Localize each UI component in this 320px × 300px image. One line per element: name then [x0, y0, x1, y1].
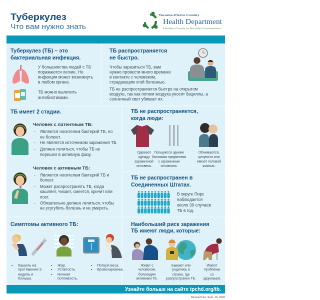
panel: what is TB: инфекция может возникнуть [38, 74, 94, 79]
panel: two stages: Обязательно должен лечиться, чтобы [40, 201, 114, 206]
symptom lists: потливость. [58, 277, 78, 281]
panel: TB not common in US: наблюдается [177, 197, 203, 202]
captions: not transmitted: имеют половой [197, 159, 221, 163]
panel: TB not common in US: В округе Пирс [177, 192, 204, 196]
captions: not transmitted: бытовыми предметами [152, 155, 186, 159]
panel: not transmitted when: когда люди: [131, 116, 164, 122]
panel: main background [6, 36, 225, 294]
risk captions: Бывают или [171, 263, 191, 267]
panel: two stages: - [34, 172, 36, 177]
panel: highest risk [131, 221, 222, 281]
symptom lists: Усталость. [58, 268, 76, 272]
icon: elderly man with cane [203, 238, 222, 260]
panel: TB not common in US: ТБ не распространен в [131, 175, 193, 181]
panel: not transmitted when [131, 109, 221, 168]
risk captions: Имеют [207, 263, 218, 267]
panel: two stages: ТБ имеет 2 стадии. [10, 110, 62, 116]
panel: what is TB: антибиотиками. [38, 95, 69, 100]
panel: spreads slowly: Чтобы заразиться ТБ, вам [110, 64, 161, 69]
symptom lists: • [91, 263, 93, 267]
captions: not transmitted: Одевают [137, 150, 151, 154]
icon: sweating person [54, 235, 74, 256]
chart: 30 cases pictogram [138, 191, 170, 213]
risk captions: со [210, 272, 214, 276]
panel: TB not common in US: Соединенных Штатах. [131, 182, 191, 188]
risk captions: Живут с [141, 263, 154, 267]
panel: not transmitted when: ТБ не распространяется, [131, 109, 198, 115]
panel: what is TB: У большинства людей с ТБ [38, 64, 91, 69]
panel: two stages [10, 110, 117, 211]
panel: two stages: болеет. [40, 178, 54, 182]
logo: Tacoma-Pierce County Health Department: Tacoma-Pierce County [158, 13, 200, 17]
captions: not transmitted: целуются или [198, 155, 220, 159]
icon: two men on sofa with clock [188, 48, 218, 81]
risk captions: распространен ТБ. [166, 277, 196, 281]
symptom lists: • [51, 272, 53, 276]
panel: two stages: - [34, 129, 36, 134]
title [10, 12, 86, 31]
icon: cutlery [169, 125, 178, 146]
panel: two stages: Должен лечиться, чтобы ТБ не [40, 147, 101, 152]
risk captions: человеком, [138, 268, 156, 272]
panel: what is TB: в любом органе. [38, 79, 70, 84]
panel: what is TB [10, 48, 94, 101]
title: Что вам нужно знать [10, 22, 86, 31]
icon: bathroom scale [83, 237, 100, 254]
icon: person with latent TB [12, 124, 28, 155]
footer band: Узнайте больше на сайте tpchd.org/tb. [125, 286, 221, 293]
icon: antibiotics [14, 89, 26, 101]
icon: traveller with globe [166, 240, 196, 260]
panel: spreads slowly [110, 48, 218, 101]
icon: lungs [12, 65, 29, 84]
panel: spreads slowly: не быстро. [110, 55, 139, 62]
panel: two stages: не усугубить болезнь и не умереть. [40, 206, 109, 211]
captions: not transmitted: человека. [136, 164, 152, 168]
captions: not transmitted: жизнью. [203, 164, 215, 168]
risk captions: стране, где [172, 272, 190, 276]
panel: two stages: перешел в активную фазу. [40, 152, 92, 157]
panel: two stages: - [34, 201, 36, 206]
panel: spreads slowly: воздухе, так как потоки воздуха уносят бациллы, а [110, 91, 209, 96]
symptom lists: • [91, 268, 93, 272]
logo: Tacoma-Pierce County Health Department [143, 12, 223, 30]
panel: two stages: - [34, 147, 36, 152]
captions: not transmitted: Обнимаются, [198, 150, 220, 154]
captions: not transmitted: человеком. [161, 164, 177, 168]
risk captions: здоровьем. [203, 277, 221, 281]
captions: not transmitted: одежду [138, 155, 150, 159]
risk captions: проблемы [204, 268, 221, 272]
risk captions [136, 263, 221, 281]
panel: spreads slowly: ТБ распространяется [110, 49, 167, 55]
symptom lists: • [51, 268, 53, 272]
panel: two stages: поет. [40, 195, 49, 200]
symptom lists: Жар. [58, 263, 66, 267]
panel: spreads slowly: ТБ не распространяется быстро на открытом [110, 86, 198, 91]
panel: spreads slowly: страдающим этой болезнью. [110, 79, 166, 84]
footer band [6, 285, 225, 294]
symptom lists: недель и [18, 272, 33, 276]
icon: coughing person [11, 234, 27, 256]
icon: kissing couple [199, 123, 218, 147]
captions: not transmitted [135, 150, 221, 168]
captions: not transmitted: с зараженным [158, 159, 180, 163]
panel: two stages: - [34, 184, 36, 189]
symptom lists [12, 263, 124, 281]
panel: spreads slowly: солнечный свет убивает их. [110, 96, 164, 101]
symptom lists: Кровохарканье. [97, 268, 124, 272]
panel: what is TB: ТБ можно вылечить [38, 89, 78, 94]
icon: person with active TB [12, 172, 28, 204]
panel: two stages: - [34, 140, 36, 145]
icon: sick person with caregiver [132, 238, 158, 260]
icon: shirt [131, 125, 154, 147]
captions: not transmitted: Пользуются одними [154, 150, 184, 154]
panel: what is TB: поражаются легкие. Но [38, 69, 84, 74]
risk captions: родились в [172, 268, 190, 272]
panel: two stages: Человек с латентным ТБ: [33, 122, 93, 127]
panel: TB not common in US: ТБ в год. [177, 208, 194, 213]
icon: thermometer [33, 236, 49, 254]
panel: what is TB: Туберкулез (ТБ) – это [10, 48, 69, 55]
panel: spreads slowly: нужно провести много времени [110, 69, 171, 74]
panel: symptoms: Симптомы активного ТБ: [10, 222, 78, 228]
icon: person coughing blood [105, 234, 122, 258]
revision note: Revised Nov. Sept. 10, 2020 [191, 295, 226, 299]
panel: two stages: Является носителем бактерий ТБ, но [40, 129, 113, 134]
symptom lists: Ночная [58, 272, 70, 276]
panel: symptoms [10, 222, 124, 281]
risk captions: болеющим [138, 272, 156, 276]
risk captions: активным ТБ. [136, 277, 158, 281]
top teal band [6, 36, 225, 44]
logo: Tacoma-Pierce County Health Department: Health Department [163, 17, 223, 26]
symptom lists: протяжении 3 [18, 268, 41, 272]
panel: what is TB: бактериальная инфекция. [10, 55, 81, 62]
panel: two stages: кашляет, чихает, смеется, кричит или [40, 189, 113, 194]
panel: two stages: Человек с активным ТБ: [33, 166, 91, 171]
title: Туберкулез [10, 12, 67, 23]
panel: two stages: Является носителем бактерий ТБ и [40, 172, 110, 177]
symptom lists: Кашель на [18, 263, 37, 267]
panel: two stages: Может распространять ТБ, когда [40, 184, 105, 189]
panel: highest risk: Наибольший риск заражения [131, 221, 209, 228]
symptom lists: • [12, 263, 14, 267]
symptom lists: • [51, 263, 53, 267]
panel: two stages: не болеют. [40, 134, 61, 139]
panel: TB not common in US [131, 175, 212, 213]
panel: highest risk: ТБ имеют люди, которые: [131, 228, 201, 234]
logo: Tacoma-Pierce County Health Department: Healthy People in Healthy Communities [162, 27, 221, 30]
captions: not transmitted: зараженной [135, 159, 154, 163]
symptom lists: Потеря веса. [97, 263, 119, 267]
panel: TB not common in US: около 30 случаев [177, 202, 212, 208]
panel: two stages: Не является источником заражения ТБ. [40, 140, 117, 145]
symptom lists: больше. [18, 277, 32, 281]
panel: spreads slowly: в контакте с человеком, [110, 74, 156, 79]
